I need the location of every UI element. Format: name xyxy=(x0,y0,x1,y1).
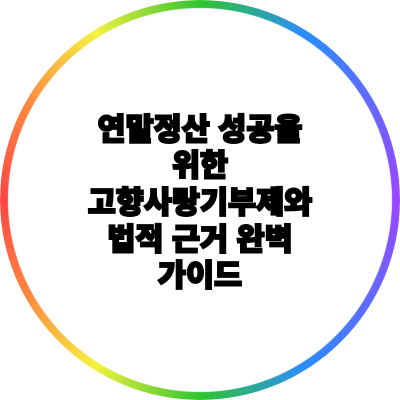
title: 고향사랑기부제와 xyxy=(88,186,312,220)
title xyxy=(88,112,312,293)
title: 위한 xyxy=(172,149,228,183)
title: 가이드 xyxy=(158,259,242,293)
title: 법적 근거 완벽 xyxy=(107,223,293,257)
title: 연말정산 성공을 xyxy=(98,112,302,146)
